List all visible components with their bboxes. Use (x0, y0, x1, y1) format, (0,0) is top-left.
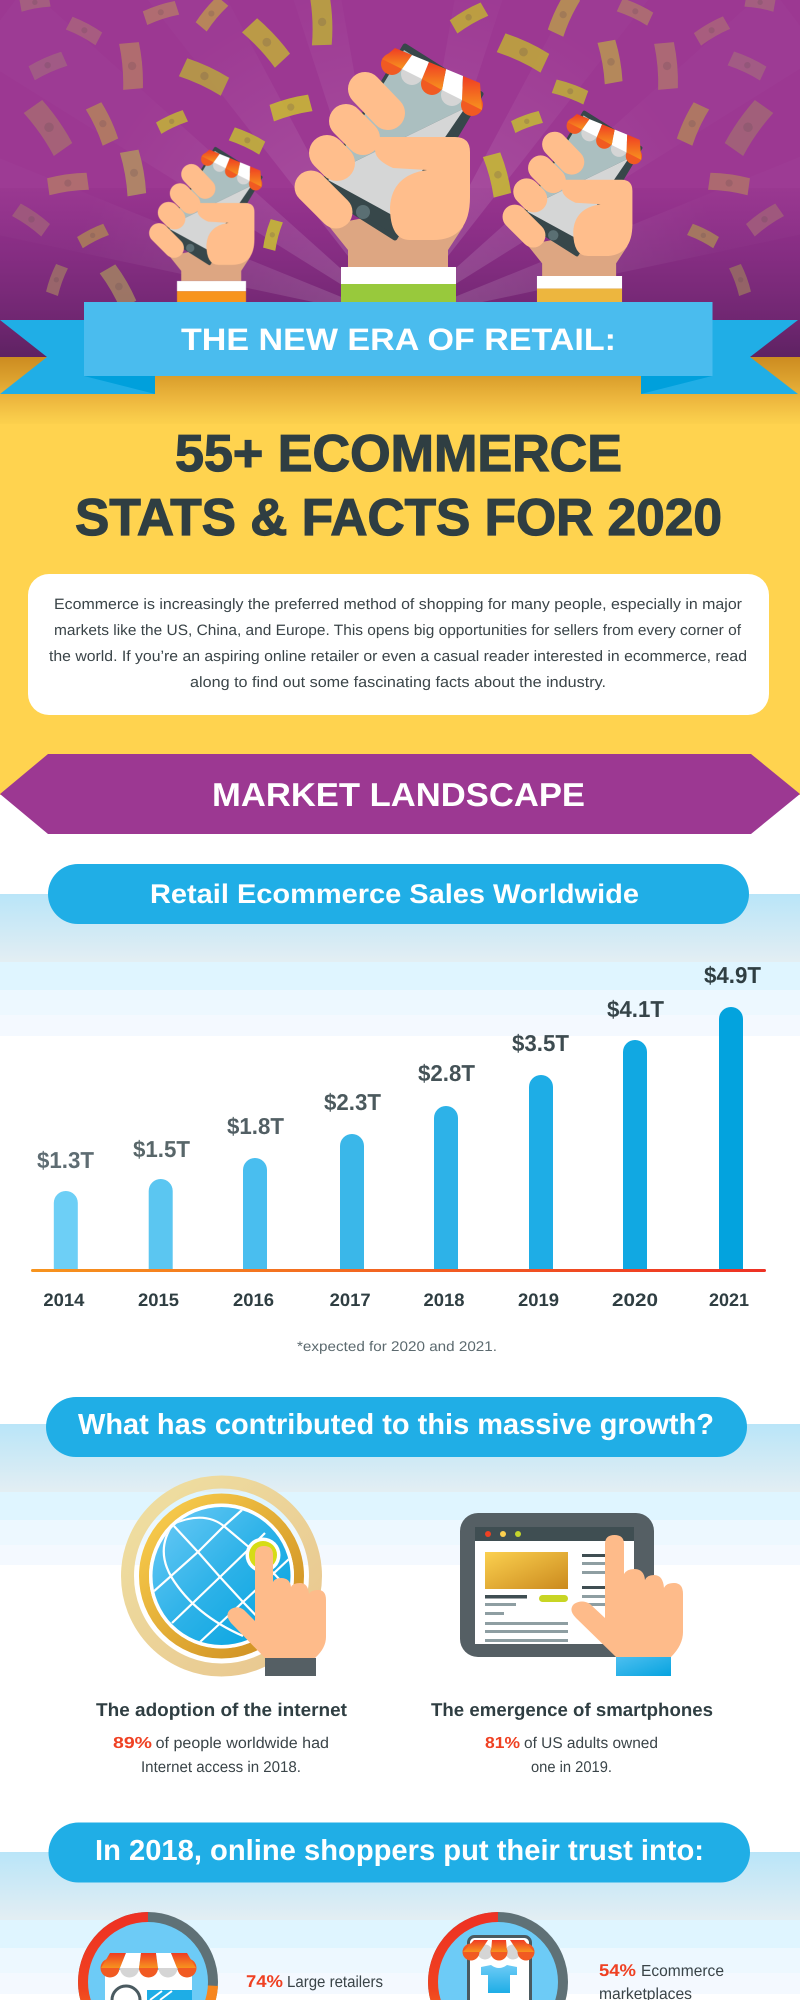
text: 54% ecommerce marketplaces: 54% (599, 1961, 636, 1980)
text: 74% large retailers: 74% (246, 1972, 283, 1991)
heading pill (48, 1822, 750, 1882)
heading pill (46, 1397, 747, 1457)
text block: emergence of smartphones: The emergence of smartphones (431, 1699, 713, 1720)
text block: adoption of the internet: Internet access in 2018. (141, 1759, 301, 1776)
ribbon right tail (641, 320, 798, 394)
text block: adoption of the internet: of people worldwide had (156, 1735, 329, 1752)
year labels: 2021 (709, 1290, 749, 1310)
heading pill (48, 864, 749, 924)
section banner: market landscape: MARKET LANDSCAPE (212, 776, 585, 813)
top ribbon banner (0, 302, 798, 394)
footnote: *expected for 2020 and 2021. (297, 1338, 497, 1354)
panel: what has contributed to growth (0, 1397, 800, 1776)
value labels: $2.3T (324, 1089, 381, 1115)
value labels: $3.5T (512, 1030, 569, 1056)
icon: right hand holding phone, yellow cuff (515, 112, 642, 333)
section banner: market landscape (0, 754, 800, 834)
intro text box: markets like the US, China, and Europe. This opens big opportunities for sellers from every corner of (54, 622, 742, 639)
header illustration: purple background with money and hands (0, 0, 800, 358)
text block: emergence of smartphones (431, 1699, 713, 1776)
text block: emergence of smartphones: 81% (485, 1735, 520, 1752)
year labels: 2017 (330, 1290, 371, 1310)
intro text box: along to find out some fascinating facts about the industry. (190, 674, 606, 691)
text: 54% ecommerce marketplaces (599, 1961, 724, 2000)
text: 54% ecommerce marketplaces: Ecommerce (641, 1963, 724, 1980)
icon: small hand holding phone, orange cuff (159, 148, 262, 327)
pale blue backdrop (0, 894, 800, 1036)
year labels: 2020 (612, 1290, 658, 1310)
value labels: $1.8T (227, 1113, 284, 1139)
intro text box: the world. If you’re an aspiring online retailer or even a casual reader interested in ecommerce, read (49, 648, 747, 665)
ribbon centre (84, 302, 712, 376)
falling money bills (12, 0, 784, 310)
main title: STATS & FACTS FOR 2020 (75, 489, 722, 547)
pale blue backdrop (0, 1424, 800, 1565)
year labels: 2016 (233, 1290, 274, 1310)
year labels: 2015 (138, 1290, 179, 1310)
year labels (43, 1290, 749, 1310)
icon: phone storefront donut 54% (428, 1912, 568, 2000)
text block: emergence of smartphones: one in 2019. (531, 1759, 612, 1776)
year labels: 2019 (518, 1290, 559, 1310)
heading pill: Retail Ecommerce Sales Worldwide (150, 879, 639, 909)
value labels: $4.9T (704, 962, 761, 988)
value labels: $4.1T (607, 996, 664, 1022)
heading pill: In 2018, online shoppers put their trust into: (95, 1835, 704, 1867)
value labels (37, 962, 761, 1173)
icon: large centre hand holding phone, green cuff (311, 46, 483, 308)
year labels: 2014 (43, 1290, 84, 1310)
heading pill: What has contributed to this massive growth? (78, 1409, 714, 1441)
value labels: $2.8T (418, 1060, 475, 1086)
icon: globe with pointing hand (128, 1482, 326, 1676)
ribbon heading: THE NEW ERA OF RETAIL: (181, 322, 616, 357)
value labels: $1.5T (133, 1136, 190, 1162)
text block: adoption of the internet: The adoption of the internet (96, 1699, 347, 1720)
icon: tablet with pointing hand (460, 1513, 683, 1676)
main title (75, 425, 722, 547)
text: 74% large retailers (246, 1972, 383, 1991)
radiating light rays (0, 0, 800, 320)
main title: 55+ ECOMMERCE (175, 425, 622, 483)
yellow title panel (0, 357, 800, 795)
text block: adoption of the internet (96, 1699, 347, 1776)
ribbon left tail (0, 320, 155, 394)
intro text box: Ecommerce is increasingly the preferred method of shopping for many people, especially in major (54, 596, 742, 613)
value labels: $1.3T (37, 1147, 94, 1173)
text block: emergence of smartphones: of US adults owned (524, 1735, 658, 1752)
intro text box (28, 574, 769, 715)
bar chart (31, 1007, 766, 1272)
icon: store donut 74% (78, 1912, 218, 2000)
panel: online shopper trust (0, 1822, 800, 2000)
text block: adoption of the internet: 89% (113, 1735, 152, 1752)
pale blue backdrop (0, 1852, 800, 1994)
year labels: 2018 (424, 1290, 464, 1310)
panel: retail ecommerce sales chart (0, 864, 800, 1354)
text: 74% large retailers: Large retailers (287, 1974, 383, 1991)
